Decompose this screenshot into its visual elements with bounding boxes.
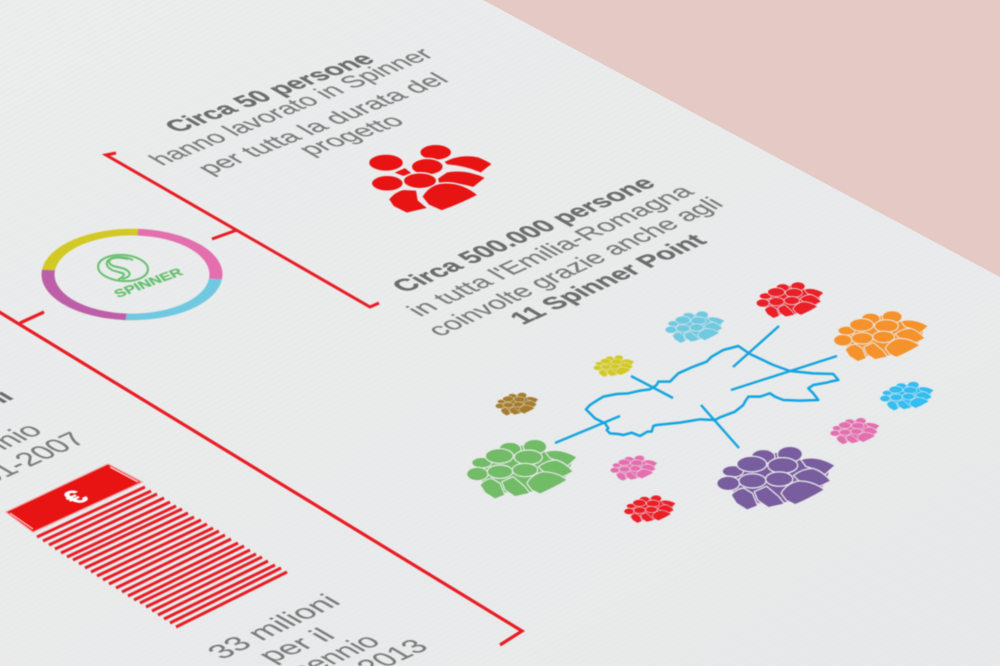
crowd: red top	[756, 282, 824, 318]
crowd: brown	[495, 392, 539, 416]
icon: red crowd	[368, 144, 493, 213]
logo wordmark: SPINNER	[111, 265, 186, 300]
line: 33 milioni: 33 milioni	[200, 590, 348, 664]
line 2: in tutta l'Emilia-Romagna	[401, 182, 701, 320]
ring segment blue	[126, 279, 216, 317]
text block: upper left budget	[0, 391, 81, 481]
ring segment pink	[138, 232, 216, 279]
crowd: light blue	[880, 381, 934, 411]
spinner ring	[48, 232, 216, 317]
upper red bracket	[106, 153, 379, 307]
line 3: coinvolte grazie anche agli	[421, 194, 730, 340]
line 4: 11 Spinner Point	[504, 231, 713, 328]
crowd: orange	[834, 311, 928, 362]
line: per il: per il	[250, 625, 343, 666]
ring segment yellow	[48, 232, 138, 270]
bar header	[6, 464, 142, 532]
map: Emilia-Romagna outline	[586, 346, 838, 436]
text block: 500.000 persone	[386, 174, 730, 340]
map connector lines	[555, 326, 837, 448]
line 3: per tutta la durata del	[191, 70, 455, 178]
stripes	[37, 487, 287, 627]
bar header inner edge	[10, 467, 138, 529]
bar: 33 million	[6, 464, 287, 627]
ring segment purple	[48, 270, 126, 317]
crowd: cyan	[665, 311, 725, 343]
crowd: yellow	[594, 355, 634, 377]
line 4: progetto	[292, 112, 411, 159]
crowd: pink right	[830, 418, 880, 444]
text block: circa 50 persone	[143, 45, 455, 178]
euro sign: €	[55, 486, 96, 508]
logo mark	[97, 253, 149, 283]
lower red bracket	[0, 310, 522, 645]
crowd: red bottom	[624, 495, 676, 523]
pink table corner	[483, 0, 1000, 277]
heading line: Circa 50 persone	[159, 50, 382, 136]
crowd: pink left	[610, 455, 658, 481]
spinner logo	[97, 253, 186, 300]
text block: 33 milioni	[200, 590, 436, 666]
heading line: Circa 500.000 persone	[386, 174, 662, 296]
crowd: green	[467, 439, 577, 499]
crowd: purple	[717, 446, 835, 510]
line 2: hanno lavorato in Spinner	[143, 45, 441, 169]
